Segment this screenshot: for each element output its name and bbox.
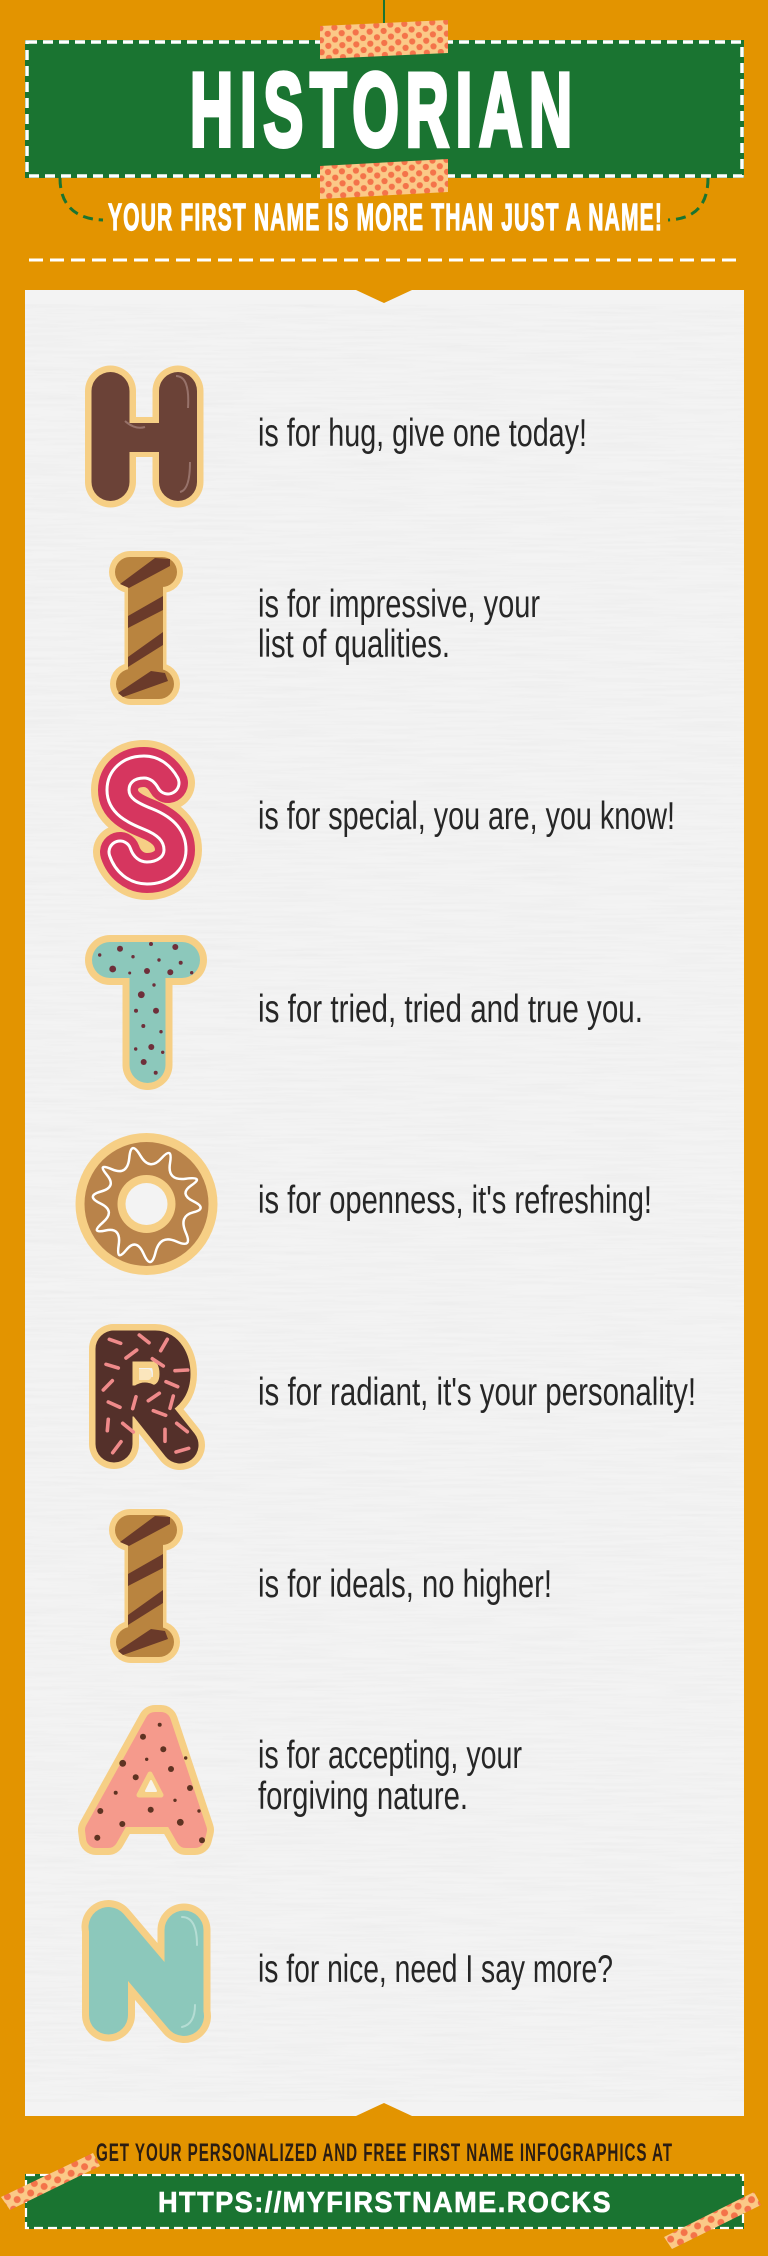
icon: letter O cookie (76, 1133, 218, 1275)
icon: letter R cookie (103, 1335, 189, 1453)
banner stitched border (27, 42, 742, 176)
footer stitched border (26, 2175, 743, 2228)
row: N (108, 1917, 613, 2027)
text: I line 2: list of qualities. (258, 623, 450, 666)
text: I line 1: is for impressive, your (258, 583, 540, 626)
footer url: HTTPS://MYFIRSTNAME.ROCKS (158, 2187, 612, 2219)
row: I (118, 558, 540, 697)
icon: letter I cookie (118, 558, 170, 697)
icon: letter S cookie (118, 767, 175, 873)
row: H (110, 376, 587, 492)
icon: letter T cookie (98, 942, 193, 1075)
white dashed divider (29, 258, 739, 262)
row: I second (118, 1516, 552, 1655)
footer banner (25, 2174, 744, 2229)
text: I second: is for ideals, no higher! (258, 1563, 552, 1606)
top tape (320, 20, 448, 59)
row: A (94, 1722, 522, 1843)
text: H: is for hug, give one today! (258, 412, 587, 455)
right dashed curve (668, 178, 708, 220)
main panel (25, 290, 744, 2116)
footer (1, 2139, 761, 2249)
text: N: is for nice, need I say more? (258, 1948, 613, 1991)
icon: letter N cookie (108, 1917, 197, 2027)
hanging line (383, 0, 385, 24)
text: T: is for tried, tried and true you. (258, 988, 643, 1031)
left tape (1, 2153, 100, 2210)
icon: letter A cookie (94, 1722, 205, 1843)
text: A line 2: forgiving nature. (258, 1775, 468, 1818)
header (25, 0, 744, 239)
text: A line 1: is for accepting, your (258, 1734, 522, 1777)
left dashed curve (60, 178, 103, 220)
bottom tape (320, 159, 448, 199)
row: S (118, 767, 675, 873)
row: R (103, 1335, 696, 1453)
right tape (664, 2192, 761, 2249)
row: O (76, 1133, 652, 1275)
icon: letter H cookie (110, 376, 190, 492)
row: T (98, 942, 643, 1075)
icon: letter I cookie second (118, 1516, 170, 1655)
title banner (25, 40, 744, 178)
